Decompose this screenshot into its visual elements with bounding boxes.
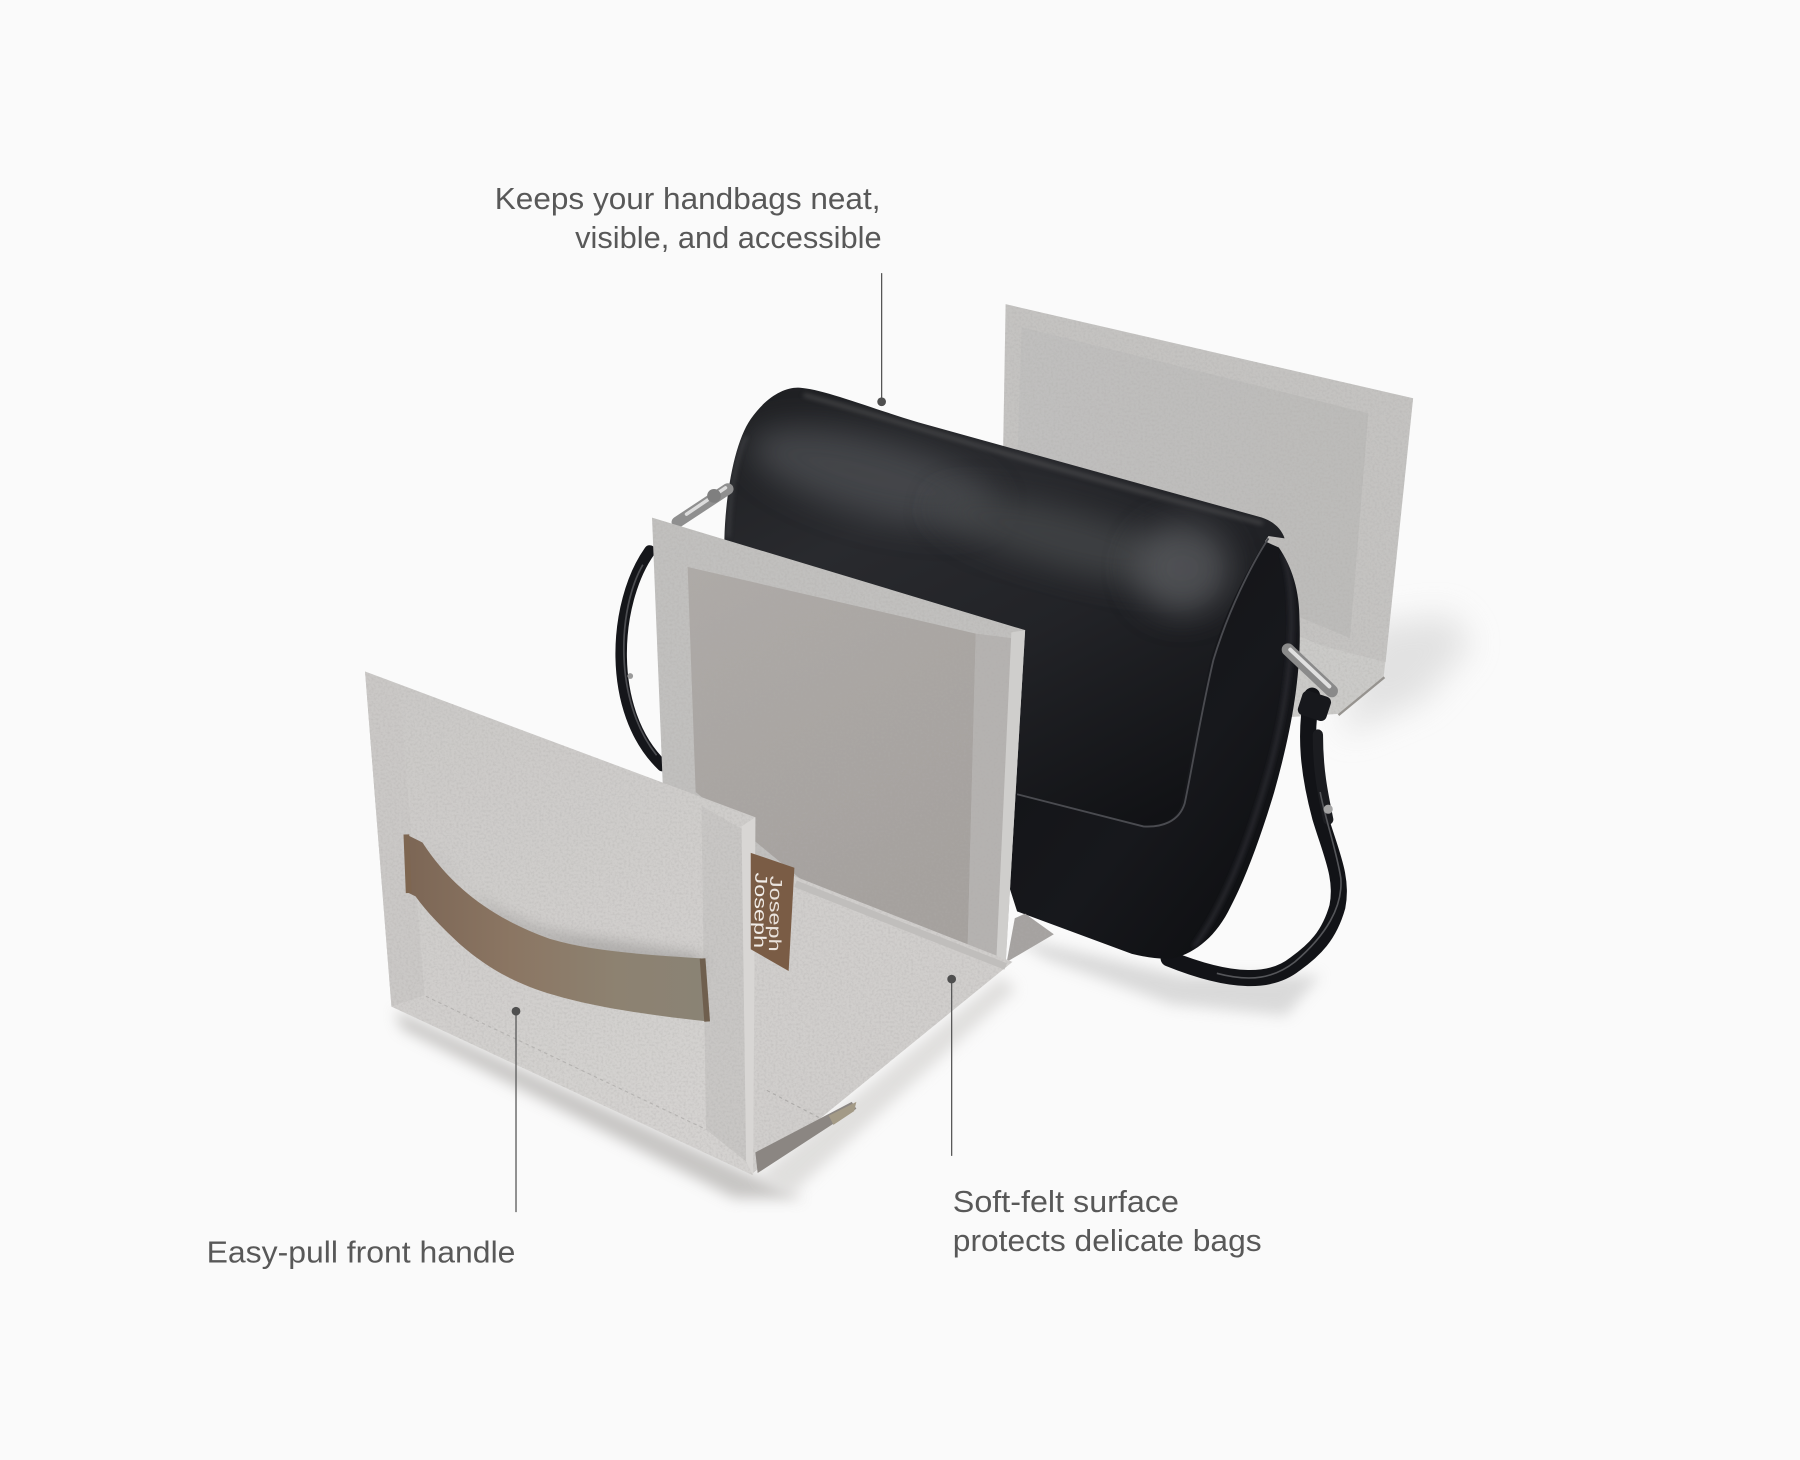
text: felt callout: protects delicate bags [953,1223,1262,1258]
handbag [724,388,1300,959]
callout line: handle [512,1007,520,1212]
text: felt callout: Soft-felt surface [953,1184,1179,1219]
floor seam [796,884,1006,966]
panel: front divider [365,671,755,1175]
connecting floor strip [1007,914,1054,962]
ground shadows [395,614,1472,1198]
brand tag: Joseph [750,872,771,948]
panel: back divider [1002,304,1413,717]
text: bag callout: Keeps your handbags neat, [495,181,880,216]
floor tuck [755,1102,856,1173]
bag strap: right lower [1169,696,1341,978]
light outer edge [996,630,1025,964]
bag strap: left loop [621,551,662,766]
handle strap [406,834,708,1022]
brand tag [750,853,794,971]
text: handle callout: Easy-pull front handle [207,1235,515,1270]
bottom stitching [426,996,706,1129]
upright [652,518,1025,964]
text: bag callout [495,181,882,255]
brand tag: Joseph [765,876,786,952]
right strip [701,806,746,1162]
back floor [1263,614,1386,717]
panel: middle divider [652,518,1054,964]
text: bag callout: visible, and accessible [575,220,882,255]
bag flap [724,388,1285,825]
text: felt callout [953,1184,1262,1258]
light fold edge [742,817,755,1175]
floor stitching [767,1090,824,1120]
handle shadow [422,842,701,973]
back upright [1002,304,1413,662]
bag body [964,538,1300,959]
callout line: bag [877,273,886,406]
face [365,671,755,1175]
metal clip: left [677,488,728,522]
left strip [365,671,425,1007]
panel: front floor [748,867,1012,1173]
callout line: felt [947,975,956,1156]
inner felt [688,567,976,945]
flap edge highlight [1017,538,1268,827]
right strip [968,634,1011,958]
metal clip: right [1288,650,1333,723]
back panel inner [1016,327,1368,638]
